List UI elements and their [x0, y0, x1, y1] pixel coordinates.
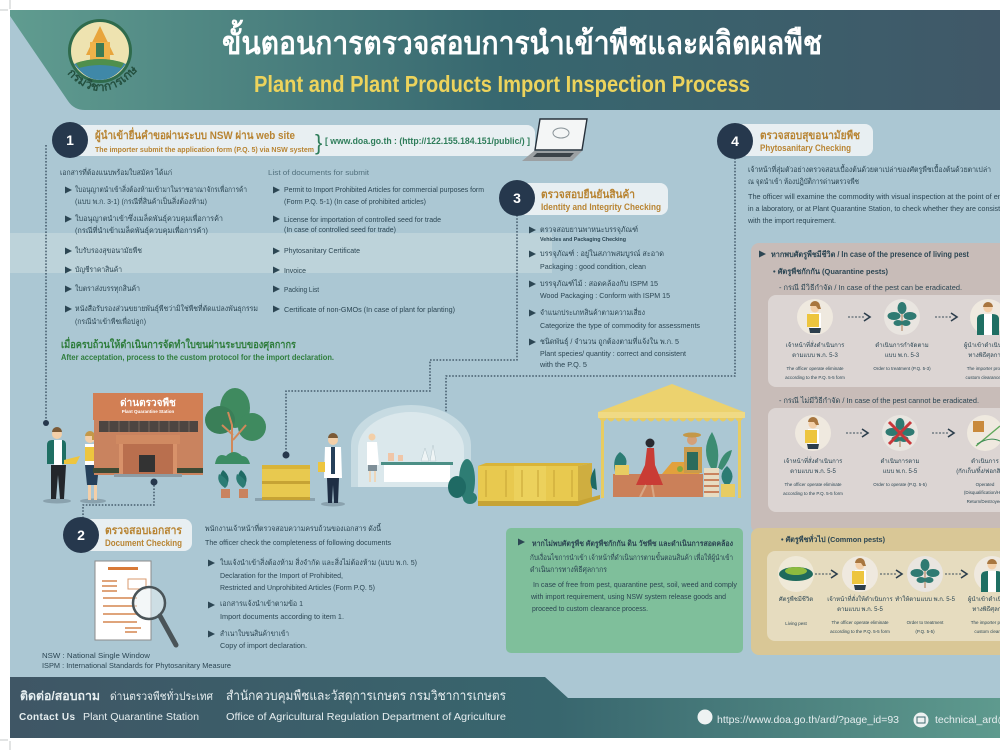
documents list English: Invoice [284, 266, 306, 275]
callout: no pest found: In case of free from pest, quarantine pest, soil, weed and comply [533, 580, 737, 589]
flow: pest cannot be eradicated: ตามแบบ พ.ก. 5-5 [790, 468, 836, 475]
step 2 description: Copy of import declaration. [220, 641, 307, 650]
callout: no pest found: with import requirement, using NSW system release goods and [530, 592, 726, 601]
flow: pest can be eradicated: เจ้าหน้าที่สั่งดำเนินการ [786, 341, 845, 349]
flow: pest cannot be eradicated [768, 408, 1000, 512]
callout: no pest found: proceed to custom clearance process. [532, 604, 648, 613]
flow: pest can be eradicated: แบบ พ.ก. 5-3 [885, 352, 920, 359]
flow: common pests: Order to treatment [907, 620, 944, 625]
contact English: Plant Quarantine Station [83, 712, 199, 723]
step 2 heading: ตรวจสอบเอกสาร [105, 525, 182, 537]
flow: common pests: ตามแบบ พ.ก. 5-5 [837, 606, 883, 613]
callout: no pest found [506, 528, 743, 653]
eradicated case label: - กรณี มีวิธีกำจัด / In case of the pest can be eradicated. [779, 283, 962, 292]
website address: [ www.doa.go.th : (http://122.155.184.151/public/) ] [325, 136, 530, 146]
documents list Thai: (กรณีนำเข้าพืชเพื่อปลูก) [75, 316, 146, 326]
not eradicated case label: - กรณี ไม่มีวิธีกำจัด / In case of the pest cannot be eradicated. [779, 396, 979, 405]
flow: pest cannot be eradicated: Order to operate (P.Q. 5-5) [873, 482, 927, 487]
step 2 panel [63, 517, 417, 650]
illustration: officers [43, 427, 106, 504]
illustration: plant quarantine station building: ด่านตรวจพืช [120, 397, 176, 409]
acceptance note: After acceptation, process to the custom protocol for the import declaration. [61, 353, 334, 362]
contact Thai: ด่านตรวจพืชทั่วประเทศ [110, 688, 213, 703]
step 2 description: Declaration for the Import of Prohibited, [220, 571, 343, 580]
flow: pest cannot be eradicated: The officer operate eliminate [785, 482, 842, 487]
step 3 checklist: with the P.Q. 5 [539, 360, 587, 369]
step 1 subheading: The importer submit the application form (P.Q. 5) via NSW system [95, 145, 314, 154]
flow: pest can be eradicated: ตามแบบ พ.ก. 5-3 [792, 352, 838, 359]
step 3 checklist: Plant species/ quantity : correct and consistent [540, 349, 687, 358]
step 2 description: Import documents according to item 1. [220, 612, 344, 621]
flow: common pests: Living pest [785, 621, 808, 626]
step 4 panel [717, 123, 1000, 225]
step 4 description: with the import requirement. [747, 216, 836, 225]
flow: common pests: (P.Q. 5-5) [915, 629, 935, 634]
documents list English: License for importation of controlled seed for trade [284, 215, 441, 224]
flow: pest can be eradicated: The officer operate eliminate [787, 366, 844, 371]
flow: pest cannot be eradicated: according to the P.Q. 5-5 form [783, 491, 843, 496]
step 3 checklist: จำแนกประเภทสินค้าตามความเสี่ยง [540, 307, 645, 317]
step 2 description: พนักงานเจ้าหน้าที่ตรวจสอบความครบถ้วนของเอกสาร ดังนี้ [205, 523, 382, 533]
step 3 checklist: Wood Packaging : Conform with ISPM 15 [540, 291, 670, 300]
illustration: laboratory dome [351, 405, 471, 487]
flow: common pests: The officer operate eliminate [832, 620, 889, 625]
illustration: plant quarantine station building: Plant Quarantine Station [122, 409, 174, 414]
flow: pest cannot be eradicated: ดำเนินการ [971, 458, 1000, 465]
step 1 badge: 1 [66, 132, 74, 148]
flow: pest cannot be eradicated: ดำเนินการตาม [881, 458, 920, 465]
footer bar [10, 677, 1000, 738]
step 3 checklist: บรรจุภัณฑ์ไม้ : สอดคล้องกับ ISPM 15 [540, 279, 658, 288]
step 1 panel [52, 119, 587, 362]
step 3 checklist: Categorize the type of commodity for assessments [540, 321, 700, 330]
flow: pest can be eradicated: ดำเนินการกำจัดตาม [875, 342, 929, 349]
step 3 checklist: ตรวจสอบยานพาหนะบรรจุภัณฑ์ [540, 225, 638, 234]
documents list English: Phytosanitary Certificate [284, 246, 360, 255]
flow: pest cannot be eradicated: เจ้าหน้าที่สั่งดำเนินการ [784, 457, 843, 465]
website link [698, 710, 899, 726]
flow: pest cannot be eradicated: Operated [976, 482, 995, 487]
step 1 heading: ผู้นำเข้ายื่นคำขอผ่านระบบ NSW ผ่าน web site [95, 127, 295, 143]
illustration: large crates and plant [448, 459, 600, 506]
bracket brace: } [315, 130, 322, 155]
flow: common pests: เจ้าหน้าที่สั่งให้ดำเนินการ [827, 595, 894, 603]
step 2 badge [63, 517, 99, 553]
step 2 description: Restricted and Unprohibited Articles (Form P.Q. 5) [220, 583, 375, 592]
flow: pest can be eradicated: according to the P.Q. 5-5 form [785, 375, 845, 380]
callout: no pest found: ดำเนินการทางพิธีศุลกากร [530, 565, 607, 574]
contact Thai: ติดต่อ/สอบถาม [20, 689, 100, 703]
illustration: tree and potted plants [205, 388, 266, 498]
step 3 subheading: Identity and Integrity Checking [541, 202, 661, 213]
step 2 description [205, 523, 417, 650]
step 3 checklist: บรรจุภัณฑ์ : อยู่ในสภาพสมบูรณ์ สะอาด [540, 249, 664, 258]
step 2 description: เอกสารแจ้งนำเข้าตามข้อ 1 [220, 599, 303, 608]
acceptance note: เมื่อครบถ้วนให้ดำเนินการจัดทำใบขนผ่านระบบของศุลกากร [61, 336, 296, 352]
flow: common pests: according to the P.Q. 5-5 form [830, 629, 890, 634]
website link: https://www.doa.go.th/ard/?page_id=93 [717, 714, 899, 726]
flow: pest cannot be eradicated: แบบ พ.ก. 5-5 [883, 468, 918, 475]
acceptance note [61, 336, 334, 362]
panel: common pests [751, 528, 1000, 655]
abbreviations note: NSW : National Single Window [42, 651, 151, 660]
documents list English: List of documents for submit [268, 168, 370, 177]
contact English [19, 711, 506, 723]
step 3 checklist: Vehicles and Packaging Checking [540, 237, 626, 243]
step 3 checklist: Packaging : good condition, clean [540, 262, 646, 271]
step 3 heading: ตรวจสอบยืนยันสินค้า [541, 188, 635, 201]
documents list Thai: ใบตราส่งบรรทุกสินค้า [75, 284, 140, 293]
dotted connector paths [43, 145, 735, 520]
highlighted band [10, 233, 552, 273]
contact Thai: สำนักควบคุมพืชและวัสดุการเกษตร กรมวิชาการเกษตร [226, 688, 506, 704]
flow: common pests: ศัตรูพืชมีชีวิต [779, 595, 813, 603]
documents list English: Permit to Import Prohibited Articles for commercial purposes form [284, 185, 484, 194]
documents list Thai: ใบรับรองสุขอนามัยพืช [75, 246, 142, 255]
documents list Thai: (แบบ พ.ก. 3-1) (กรณีที่สินค้าเป็นสิ่งต้องห้าม) [75, 196, 207, 206]
step 4 heading: ตรวจสอบสุขอนามัยพืช [760, 129, 860, 143]
step 3 badge [499, 180, 535, 216]
icon: laptop [522, 119, 587, 161]
documents list Thai: (กรณีที่นำเข้าเมล็ดพันธุ์ควบคุมเพื่อการค้า) [75, 225, 208, 235]
documents list English: (In case of controlled seed for trade) [284, 225, 396, 234]
documents list Thai: หนังสือรับรองส่วนขยายพันธุ์พืชว่ามิใช่พืชที่ตัดแปลงพันธุกรรม [75, 303, 258, 313]
flow: pest can be eradicated [768, 295, 1000, 387]
callout: no pest found: กับเงื่อนไขการนำเข้า เจ้าหน้าที่ดำเนินการตามขั้นตอนสินค้า เพื่อให้ผู้นำเข้า [530, 552, 733, 562]
living pest heading: หากพบศัตรูพืชมีชีวิต / In case of the presence of living pest [771, 249, 969, 260]
step 3 panel [499, 180, 700, 369]
common pests label: • ศัตรูพืชทั่วไป (Common pests) [781, 533, 885, 545]
abbreviations note [42, 651, 231, 670]
email link [914, 712, 1000, 728]
header banner [10, 10, 1000, 110]
step 2 description: ใบแจ้งนำเข้าสิ่งต้องห้าม สิ่งจำกัด และสิ่งไม่ต้องห้าม (แบบ พ.ก. 5) [220, 557, 417, 567]
step 3 checklist: ชนิดพันธุ์ / จำนวน ถูกต้องตามที่แจ้งใน พ.ก. 5 [540, 336, 679, 346]
flow: common pests [767, 551, 1000, 641]
title English: Plant and Plant Products Import Inspection Process [254, 71, 750, 97]
step 2 badge: 2 [77, 527, 85, 543]
documents list Thai: บัญชีราคาสินค้า [75, 265, 122, 274]
step 4 subheading: Phytosanitary Checking [760, 143, 851, 154]
step 2 description: The officer check the completeness of following documents [205, 538, 391, 547]
documents list Thai: ใบอนุญาตนำเข้าสิ่งต้องห้ามเข้ามาในราชอาณาจักรเพื่อการค้า [75, 184, 247, 194]
documents list Thai [60, 167, 258, 326]
abbreviations note: ISPM : International Standards for Phytosanitary Measure [42, 661, 231, 670]
step 2 subheading: Document Checking [105, 538, 182, 549]
icon: document with magnifier [95, 561, 176, 645]
step 2 description: สำเนาใบขนสินค้าขาเข้า [220, 629, 289, 638]
documents list English: (Form P.Q. 5-1) (In case of prohibited articles) [284, 197, 426, 206]
step 4 description: ณ จุดนำเข้า ห้องปฏิบัติการด่านตรวจพืช [748, 177, 859, 186]
contact English: Contact Us [19, 712, 75, 723]
step 4 badge: 4 [731, 133, 739, 149]
documents list Thai: ใบอนุญาตนำเข้าซึ่งเมล็ดพันธุ์ควบคุมเพื่อการค้า [75, 213, 223, 223]
illustration: plant quarantine station building [93, 393, 203, 477]
step 1 badge [52, 122, 88, 158]
panel: living pest, quarantine pests [751, 243, 1000, 533]
contact English: Office of Agricultural Regulation Department of Agriculture [226, 711, 506, 723]
documents list English [268, 168, 484, 314]
step 3 badge: 3 [513, 190, 521, 206]
illustration: market stall [598, 384, 745, 498]
documents list English: Packing List [284, 285, 320, 294]
quarantine pests label: • ศัตรูพืชกักกัน (Quarantine pests) [773, 267, 888, 277]
step 4 description [747, 164, 1000, 225]
documents list English: Certificate of non-GMOs (In case of plant for planting) [284, 305, 455, 314]
callout: no pest found: หากไม่พบศัตรูพืช ศัตรูพืชกักกัน ดิน วัชพืช และดำเนินการสอดคล้อง [532, 538, 733, 549]
contact Thai [20, 688, 506, 704]
flow: pest can be eradicated: Order to treatment (P.Q. 5-3) [873, 366, 931, 371]
title Thai: ขั้นตอนการตรวจสอบการนำเข้าพืชและผลิตผลพืช [222, 19, 822, 61]
documents list Thai: เอกสารที่ต้องแนบพร้อมใบสมัคร ได้แก่ [60, 167, 172, 177]
step 4 badge [717, 123, 753, 159]
step 3 checklist [529, 225, 700, 369]
illustration: inspector [318, 433, 345, 506]
logo: Department of Agriculture seal [68, 19, 138, 92]
flow: common pests: ทำให้ตามแบบ พ.ก. 5-5 [895, 595, 956, 603]
illustration: small crates [255, 465, 315, 501]
